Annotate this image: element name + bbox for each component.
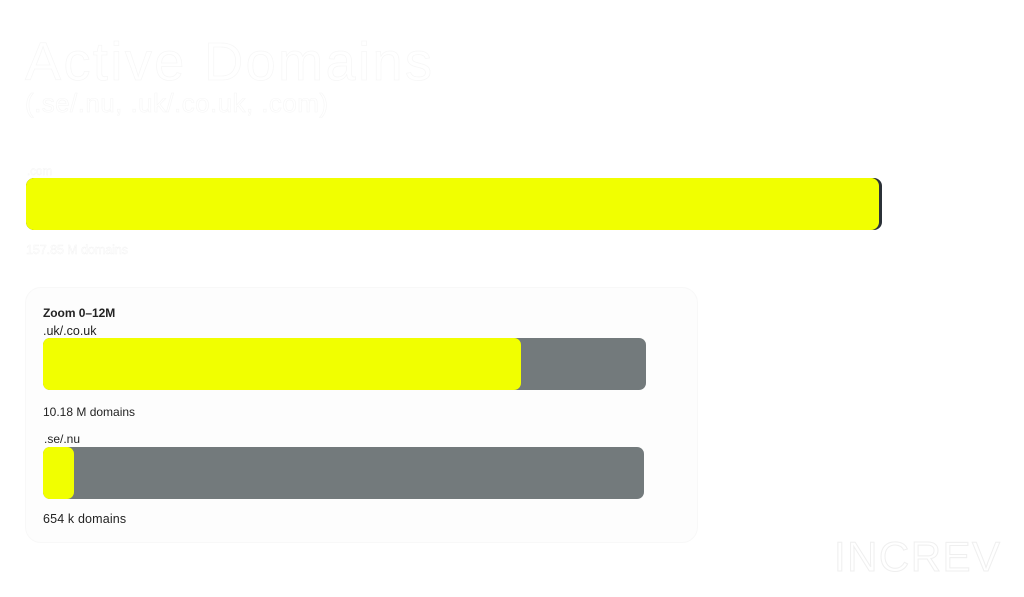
- bar fill: .uk/.co.uk: [43, 338, 521, 390]
- bar: .se/.nu: [43, 447, 644, 499]
- value: .se/.nu: 654 k domains: [43, 512, 126, 526]
- title: Active Domains: [25, 32, 432, 92]
- label: .com: .com: [27, 166, 52, 178]
- value: .uk/.co.uk: 10.18 M domains: [43, 405, 135, 419]
- logo: INCREV: INCREV: [834, 533, 1000, 580]
- panel heading: Zoom 0–12M: [43, 306, 115, 320]
- bar fill: .se/.nu: [43, 447, 74, 499]
- bar fill: .com: [26, 178, 879, 230]
- bar: .uk/.co.uk: [43, 338, 646, 390]
- bar: .com: [26, 178, 882, 230]
- label: .se/.nu: .se/.nu: [44, 432, 80, 446]
- subtitle: (.se/.nu, .uk/.co.uk, .com): [25, 88, 328, 118]
- value: .com domains: 157.85 M domains: [26, 243, 128, 257]
- label: .uk/.co.uk: .uk/.co.uk: [43, 324, 96, 338]
- panel: zoom 0–12M: [25, 287, 698, 543]
